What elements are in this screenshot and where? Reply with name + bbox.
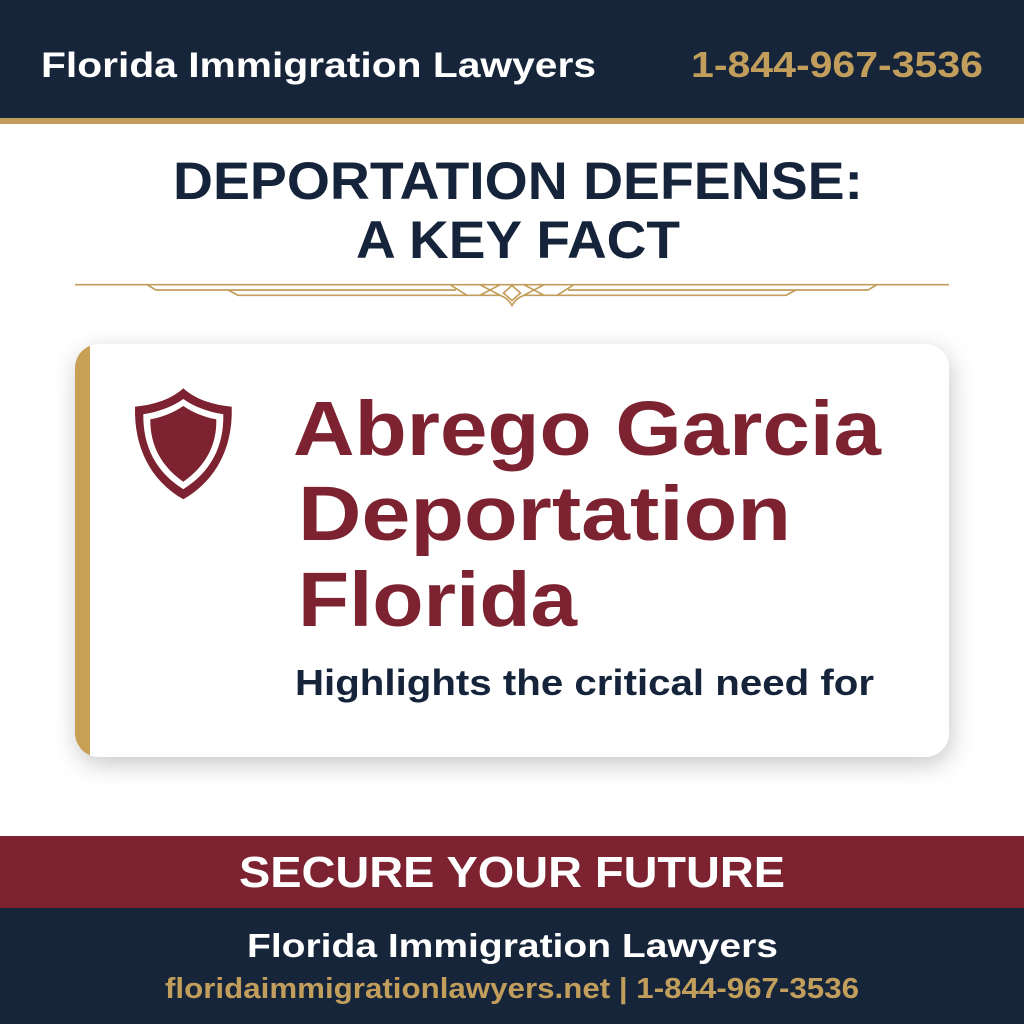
footer contact line: floridaimmigrationlawyers.net | 1-844-967-3536 [165, 973, 859, 1005]
card headline: Deportation [298, 471, 791, 557]
header phone number: 1-844-967-3536 [691, 44, 983, 85]
title: A KEY FACT [356, 211, 680, 270]
ornamental divider [75, 285, 949, 306]
footer [0, 908, 1024, 1024]
card gold accent bar [75, 344, 90, 757]
title: DEPORTATION DEFENSE: [173, 152, 863, 211]
title [173, 152, 863, 270]
card headline: Abrego Garcia [293, 386, 882, 472]
header bar [0, 0, 1024, 124]
card headline [293, 386, 882, 643]
card headline: Florida [298, 557, 578, 643]
panel: key fact card [75, 344, 949, 757]
footer firm name: Florida Immigration Lawyers [247, 927, 778, 964]
call to action band: SECURE YOUR FUTURE [239, 848, 785, 897]
icon: shield [135, 388, 232, 499]
call to action band [0, 836, 1024, 908]
card subtext: Highlights the critical need for [295, 662, 874, 703]
header firm name: Florida Immigration Lawyers [41, 46, 596, 85]
